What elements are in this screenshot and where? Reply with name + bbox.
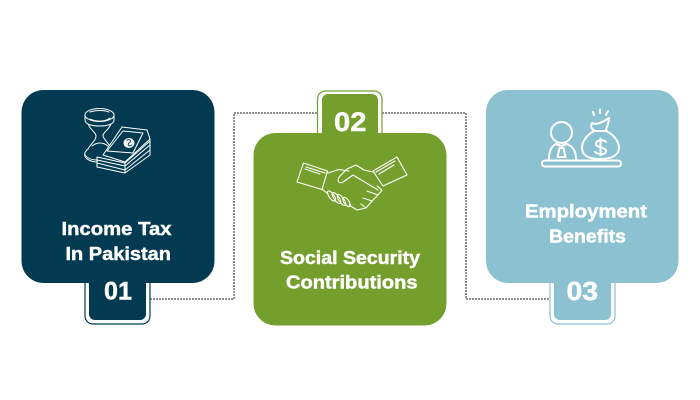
card background bbox=[486, 90, 678, 283]
heading: Benefits bbox=[549, 226, 626, 246]
card background bbox=[254, 133, 446, 326]
tab number: 02 bbox=[334, 107, 366, 137]
heading bbox=[62, 219, 172, 264]
icon: employee and money bag bbox=[542, 110, 621, 166]
panel: social security bbox=[254, 91, 446, 326]
heading bbox=[525, 202, 647, 246]
card background bbox=[22, 90, 214, 283]
heading: In Pakistan bbox=[66, 244, 171, 264]
tab number: 03 bbox=[566, 276, 598, 306]
heading: Income Tax bbox=[62, 219, 172, 239]
number tab 02 bbox=[318, 91, 382, 140]
number tab 03 bbox=[550, 275, 615, 324]
dashed connector: card 2 to card 3 bbox=[382, 113, 550, 299]
icon: hourglass and money bbox=[85, 108, 150, 173]
panel: income tax bbox=[22, 90, 214, 324]
heading: Employment bbox=[525, 202, 647, 222]
heading bbox=[280, 248, 420, 292]
heading: Social Security bbox=[280, 248, 420, 268]
icon: handshake bbox=[297, 157, 407, 210]
tab number: 01 bbox=[104, 278, 132, 306]
panel: employment benefits bbox=[486, 90, 678, 324]
dashed connector: card 1 to card 2 bbox=[150, 113, 318, 299]
heading: Contributions bbox=[286, 272, 418, 292]
number tab 01 bbox=[85, 275, 150, 324]
